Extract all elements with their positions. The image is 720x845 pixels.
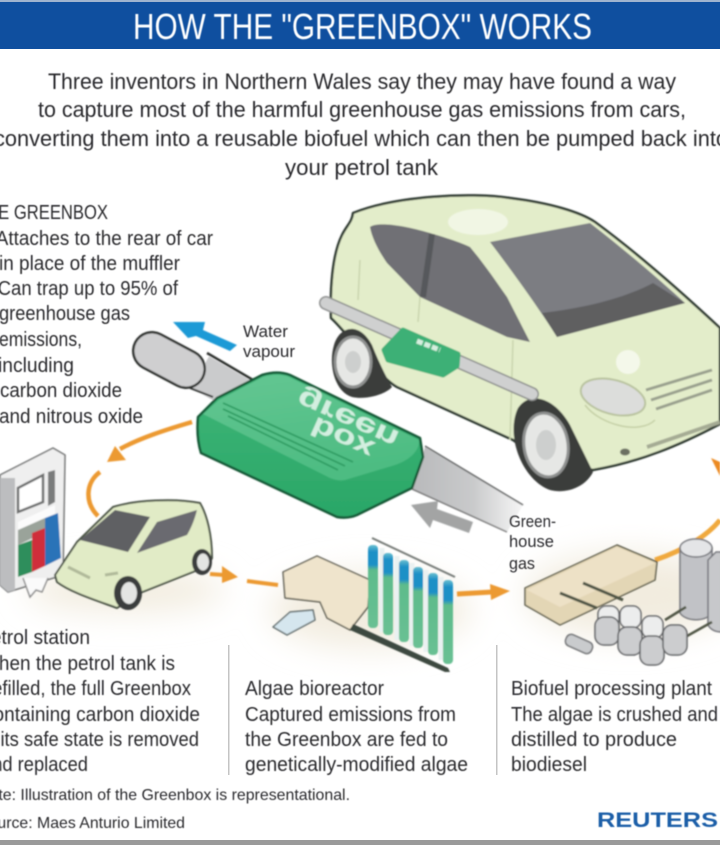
small capsule	[564, 633, 594, 655]
text block: the Greenbox: including	[0, 355, 74, 377]
tube rack	[350, 538, 455, 672]
small car wheels	[114, 549, 212, 610]
label: water vapour: Water	[243, 322, 288, 341]
label: greenhouse gas	[509, 512, 556, 573]
orange arrow: greenbox to petrol station	[88, 422, 192, 516]
exhaust and inlet pipes	[152, 351, 523, 532]
storage tanks	[595, 606, 687, 665]
divider	[496, 645, 498, 775]
small car windscreen	[80, 510, 150, 552]
footnotes	[0, 787, 350, 832]
intro text: Three inventors in Northern Wales say they may have found a way	[48, 69, 676, 94]
text block: algae bioreactor: the Greenbox are fed to	[245, 729, 448, 751]
text block: the Greenbox	[0, 202, 213, 428]
arrow: water vapour	[173, 322, 237, 351]
silos	[680, 539, 720, 632]
bonnet highlight	[616, 350, 640, 374]
text block: biofuel processing plant: Biofuel processing plant	[511, 678, 712, 700]
rear wheel	[332, 329, 392, 398]
small vehicle	[273, 610, 315, 635]
greenbox logo: green	[292, 383, 403, 455]
label: greenhouse gas: Green-	[509, 512, 556, 531]
large car	[326, 195, 720, 491]
soft beige background glows	[25, 553, 720, 648]
greenbox logo: box	[306, 411, 379, 465]
plant building	[525, 545, 657, 625]
large greenbox unit	[197, 373, 423, 518]
text block: algae bioreactor	[245, 678, 468, 776]
door lines	[358, 260, 513, 440]
text block: the Greenbox: greenhouse gas	[0, 303, 130, 325]
fuel nozzles	[18, 513, 61, 597]
headlight	[577, 372, 649, 422]
text block: algae bioreactor: Algae bioreactor	[245, 678, 384, 700]
orange arrow: car to bioreactor	[210, 566, 278, 585]
intro text: converting them into a reusable biofuel which can then be pumped back into	[0, 126, 720, 151]
text block: petrol station	[0, 627, 200, 776]
bottom rule	[0, 840, 720, 845]
roof highlight	[448, 209, 508, 235]
title bar	[0, 0, 720, 49]
intro text: your petrol tank	[285, 155, 439, 180]
text block: the Greenbox: emissions,	[0, 329, 82, 351]
orange arrow: bioreactor to plant	[457, 584, 510, 600]
biofuel processing plant	[525, 539, 720, 665]
small car side windows	[137, 510, 197, 553]
text block: biofuel processing plant: distilled to produce	[511, 729, 677, 751]
intro text	[0, 69, 720, 180]
Reuters logo: REUTERS	[597, 809, 718, 832]
intro text: to capture most of the harmful greenhouse gas emissions from cars,	[38, 97, 686, 122]
front wheel	[514, 398, 593, 491]
label: greenhouse gas: house	[509, 532, 554, 551]
algae bioreactor	[273, 538, 455, 672]
label: water vapour	[243, 322, 295, 361]
label: greenhouse gas: gas	[509, 554, 535, 573]
bioreactor building	[283, 556, 370, 630]
side windows	[370, 224, 530, 342]
car body	[331, 195, 720, 470]
petrol pump	[0, 448, 65, 597]
text block: algae bioreactor: genetically-modified algae	[245, 754, 468, 776]
divider	[228, 645, 230, 775]
greenbox logo	[292, 383, 403, 465]
text block: biofuel processing plant: biodiesel	[511, 754, 587, 776]
pipes to silos	[665, 607, 712, 640]
text block: the Greenbox: carbon dioxide	[0, 380, 122, 402]
small greenbox on car	[384, 330, 458, 375]
windscreen lower band	[542, 283, 685, 337]
text block: the Greenbox: and nitrous oxide	[0, 406, 143, 428]
label: water vapour: vapour	[243, 342, 295, 361]
arrow: greenhouse gas	[411, 501, 473, 533]
orange arrow: plant to car	[655, 458, 720, 560]
title bar: HOW THE "GREENBOX" WORKS	[133, 6, 592, 47]
grille	[646, 370, 712, 409]
text block: algae bioreactor: Captured emissions from	[245, 704, 456, 726]
bumper details	[647, 422, 720, 447]
illustration artwork	[0, 195, 720, 672]
small car at pump	[55, 500, 212, 610]
text block: the Greenbox: in place of the muffler	[0, 253, 180, 275]
windscreen	[490, 223, 685, 337]
car exhaust pipe	[326, 303, 532, 394]
text block: biofuel processing plant	[511, 678, 718, 776]
